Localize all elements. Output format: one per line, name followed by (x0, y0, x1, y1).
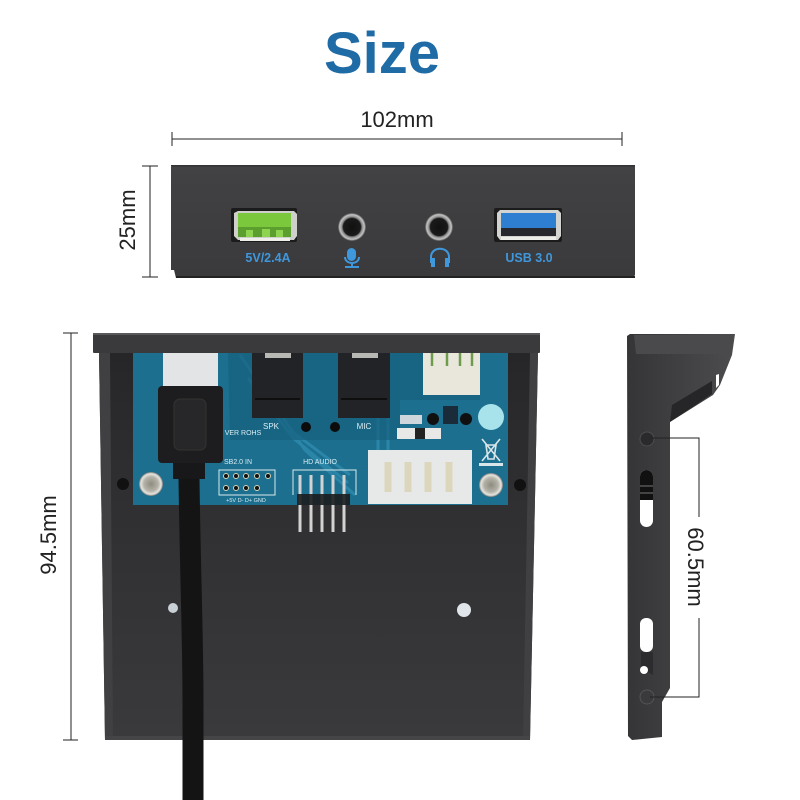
height dimension: 25mm: 25mm (115, 189, 140, 251)
USB connector on board (163, 353, 218, 386)
board silkscreen text: +5V D- D+ GND (226, 498, 266, 504)
port: microphone jack (338, 213, 366, 241)
upper slot (640, 470, 653, 527)
lower slot (640, 618, 653, 675)
white USB connector on board (423, 353, 480, 395)
width dimension: 102mm: 102mm (360, 107, 434, 132)
board silkscreen text: SPK (263, 422, 280, 431)
rivet top (640, 432, 654, 446)
board silkscreen text: MIC (357, 422, 372, 431)
label: 5V/2.4A: 5V/2.4A (245, 251, 291, 265)
board silkscreen text (224, 422, 372, 504)
depth dimension: 94.5mm (36, 333, 78, 740)
panel: top view with circuit board (93, 333, 540, 800)
port: blue USB 3.0 (494, 208, 562, 242)
rivet bottom (640, 690, 654, 704)
title: Size (324, 21, 440, 86)
microphone connector (338, 353, 390, 418)
hole spacing dimension: 60.5mm (650, 438, 708, 697)
HD audio pin header (293, 470, 356, 532)
hole spacing dimension: 60.5mm: 60.5mm (683, 527, 708, 607)
tray mounting holes (168, 603, 178, 613)
circuit board (133, 353, 508, 505)
port: green USB 5V/2.4A (231, 208, 297, 242)
board silkscreen text: VER ROHS (225, 430, 262, 437)
height dimension: 25mm (115, 166, 158, 277)
recycling mark (479, 439, 503, 466)
depth dimension: 94.5mm: 94.5mm (36, 495, 61, 575)
port: headphone jack (425, 213, 453, 241)
panel: front view of bay panel (171, 165, 635, 278)
molex power connector (368, 450, 472, 504)
metal tray (99, 353, 538, 740)
USB cable (158, 386, 223, 800)
speaker connector (252, 353, 303, 418)
icon: headphones (431, 249, 449, 267)
label: USB 3.0: USB 3.0 (505, 251, 553, 265)
small components (397, 406, 458, 439)
width dimension: 102mm (172, 107, 622, 146)
USB 2.0 header pads (219, 470, 275, 495)
board silkscreen text: HD AUDIO (303, 459, 337, 466)
panel: side bracket (627, 334, 735, 740)
screws (139, 472, 163, 496)
icon: microphone (345, 249, 359, 267)
board silkscreen text: SB2.0 IN (224, 459, 252, 466)
capacitor (478, 404, 504, 430)
front bezel (93, 333, 540, 353)
